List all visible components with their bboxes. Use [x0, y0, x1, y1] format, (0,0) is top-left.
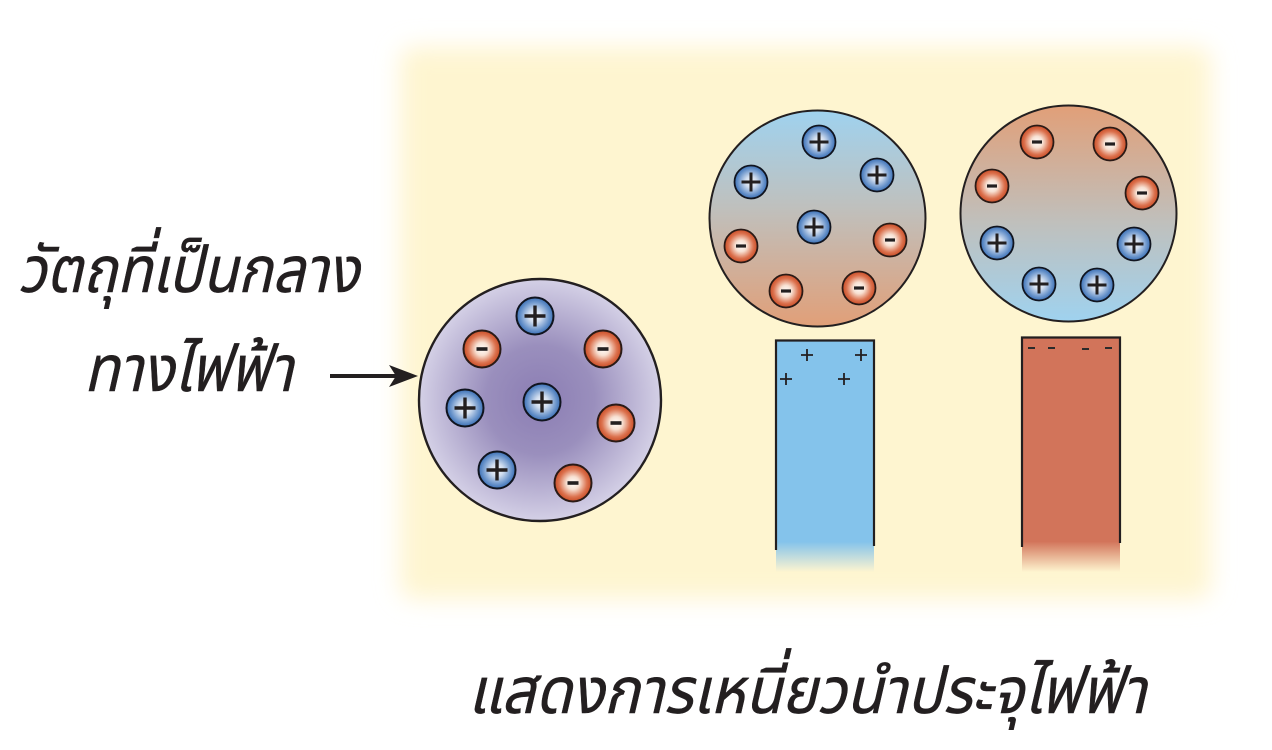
label: neutral object [18, 227, 361, 405]
caption: แสดงการเหนี่ยวนำประจุไฟฟ้า [468, 648, 1149, 730]
sphere above positive rod [710, 110, 926, 326]
neutral sphere [419, 279, 661, 521]
label: neutral object: ทางไฟฟ้า [84, 333, 296, 405]
arrow to neutral object [330, 365, 418, 387]
negative rod [1022, 337, 1120, 572]
label: neutral object: วัตถุที่เป็นกลาง [18, 227, 361, 309]
background panel [400, 47, 1211, 599]
positive rod [776, 340, 874, 572]
sphere above negative rod [960, 106, 1176, 322]
